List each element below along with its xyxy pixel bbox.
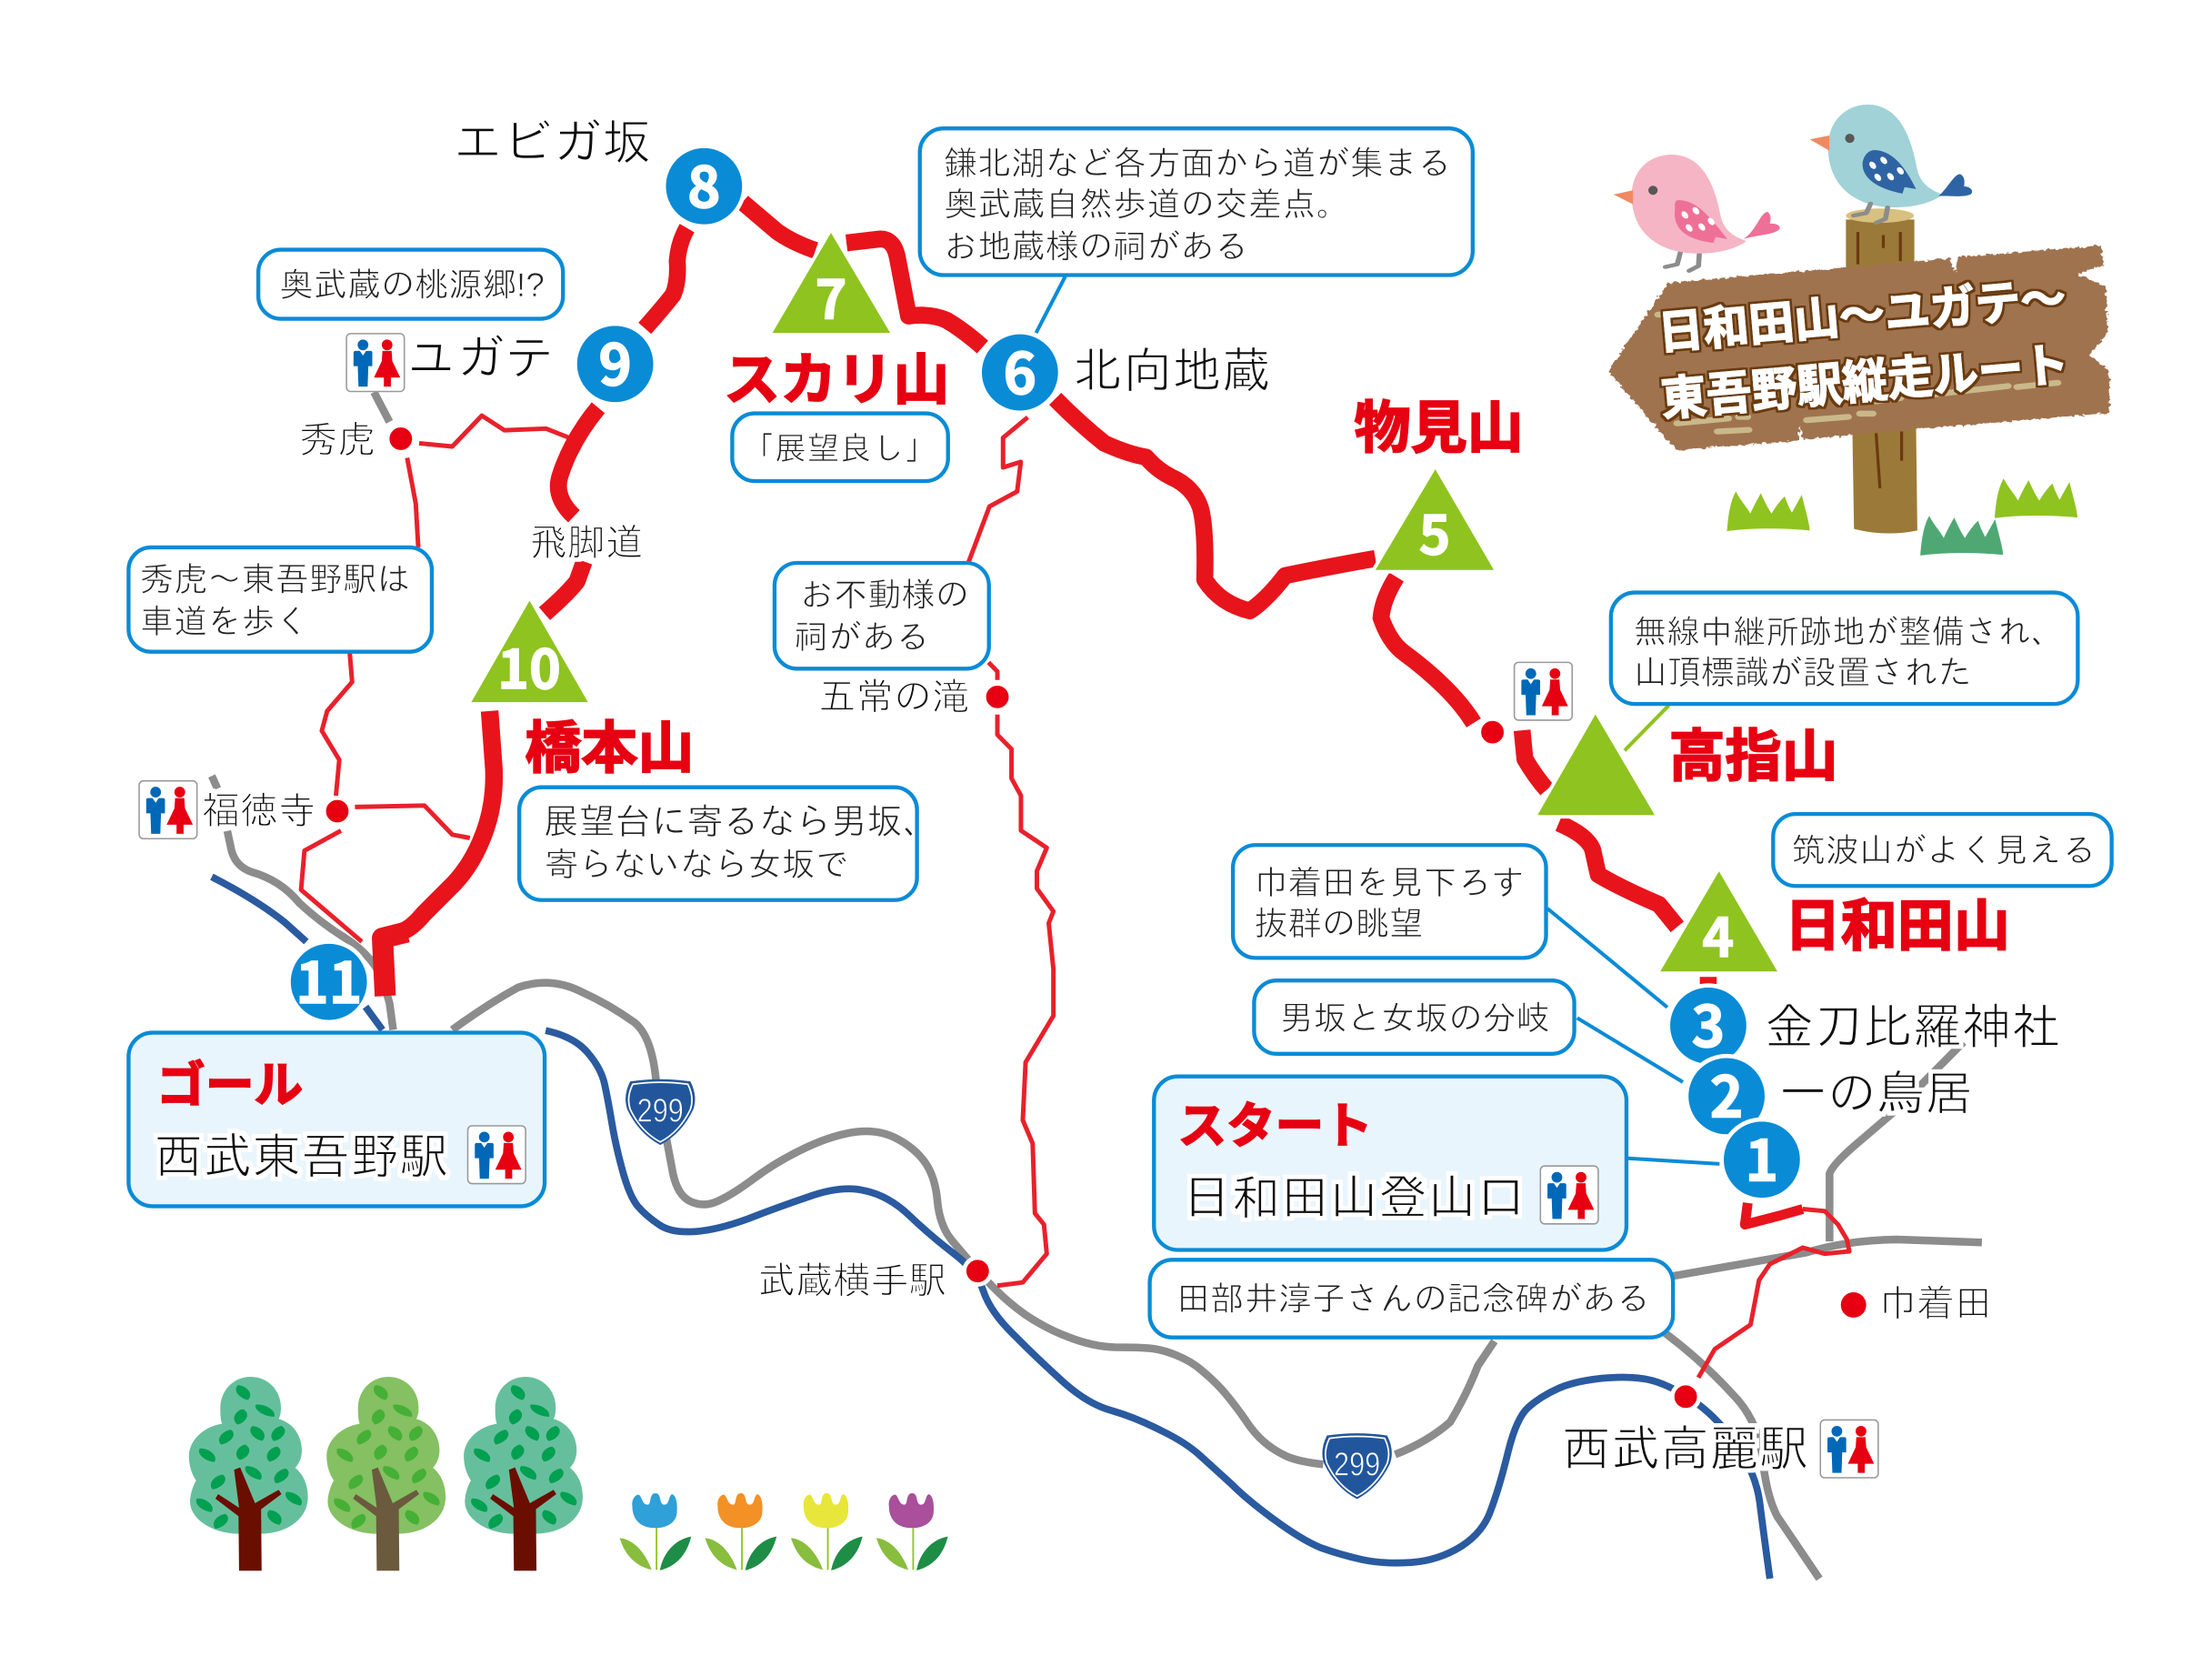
point: 高指山手前: [1479, 718, 1506, 746]
callout: 巾着田: 抜群の眺望: [1254, 905, 1423, 943]
callout: 車道: 秀虎～東吾野駅は: [140, 560, 411, 598]
start panel: [1154, 1077, 1626, 1249]
label: 飛脚道: 飛脚道: [529, 521, 644, 564]
tree 1: [189, 1377, 308, 1571]
road network: grey roads: [212, 392, 1982, 1579]
icon: toilet 福徳寺: [139, 781, 197, 838]
waypoint 3: 金刀比羅神社: 3: [1692, 981, 1725, 1063]
peak 7: スカリ山: 7: [816, 257, 846, 335]
point: 巾着田: 巾着田: [1879, 1281, 1992, 1324]
connector lines: [1036, 276, 1719, 1164]
peak 5: 物見山: 物見山: [1355, 397, 1524, 460]
thin red side trails: [301, 416, 1849, 1378]
callout: お不動様: [775, 563, 989, 668]
tree 2: [326, 1377, 445, 1571]
peak: 高指山: 高指山: [1668, 726, 1838, 788]
icon: toilet: [468, 1126, 525, 1184]
waypoint 8: エビガ坂: 8: [687, 142, 721, 224]
goal panel: [128, 1033, 545, 1206]
callout: 桃源郷: 奥武蔵の桃源郷!?: [279, 266, 545, 304]
callout: 筑波山: 筑波山がよく見える: [1791, 831, 2096, 869]
callout: 展望良し: [732, 414, 948, 481]
goal heading: ゴール: [156, 1059, 303, 1113]
sign title: [1656, 272, 2071, 426]
callout: 田部井淳子: [1150, 1260, 1673, 1338]
illustration: trees: [189, 1377, 948, 1571]
peak 10: 橋本山: [471, 601, 694, 780]
callout: 展望台: 寄らないなら女坂で: [545, 845, 849, 883]
callout: 筑波山: [1773, 814, 2112, 886]
callout: 展望良し: 「展望良し」: [742, 431, 936, 467]
callout: 展望台: 展望台に寄るなら男坂、: [544, 802, 939, 842]
waypoint 9: ユガテ: 9: [598, 320, 632, 402]
goal location: 西武東吾野駅: [154, 1130, 448, 1185]
road network: blue national route 299: [212, 877, 1770, 1579]
start heading: スタート: [1178, 1100, 1373, 1154]
peak 4: 日和田山: 4: [1702, 895, 1734, 972]
callout: 車道: 車道を歩く: [140, 603, 309, 641]
callout: 田部井淳子: 田部井淳子さんの記念碑がある: [1176, 1280, 1650, 1318]
wooden sign board: [1609, 246, 2108, 449]
peak 7: スカリ山: スカリ山: [724, 349, 949, 412]
waypoint 8: エビガ坂: [453, 115, 745, 226]
waypoint 1: 1: [1746, 1115, 1778, 1197]
point: 西武高麗駅: [1562, 1383, 1808, 1477]
tree 3: [464, 1377, 583, 1571]
peak 4: 日和田山: [1660, 871, 2010, 972]
icon: toilet 高指山: [1515, 662, 1572, 720]
waypoint 2: 一の鳥居: 一の鳥居: [1778, 1068, 1974, 1121]
callout: お不動様: 祠がある: [795, 618, 930, 657]
waypoint 6: 北向地蔵: 6: [1004, 328, 1036, 410]
peak 10: 橋本山: 10: [497, 627, 561, 704]
main route: thick red trail: [383, 202, 1803, 1225]
route 299 shield north: [626, 1080, 695, 1144]
waypoint 3: 金刀比羅神社: [1668, 981, 2061, 1066]
callout: 巾着田: 巾着田を見下ろす: [1254, 864, 1525, 902]
waypoint 11: 11: [295, 938, 362, 1019]
waypoint 3: 金刀比羅神社: 金刀比羅神社: [1765, 999, 2061, 1055]
route 299 shield north: 299: [637, 1092, 684, 1129]
point: 秀虎: 秀虎: [299, 418, 375, 461]
peak 7: スカリ山: [724, 233, 949, 412]
icon: toilet ユガテ: [346, 334, 405, 391]
point: 福徳寺: 福徳寺: [202, 789, 316, 832]
icon: toilet 西武高麗駅: [1820, 1420, 1878, 1478]
blue bird: [1810, 105, 1972, 223]
callout: 展望台: [519, 788, 939, 900]
point: 武蔵横手駅: 武蔵横手駅: [757, 1260, 946, 1302]
callout: お不動様: お不動様の: [800, 576, 969, 614]
sign title: 東吾野駅縦走ルート: [1659, 338, 2071, 426]
waypoint 9: ユガテ: [406, 320, 656, 404]
peak 5: 物見山: [1355, 397, 1524, 570]
pink bird: [1614, 155, 1780, 271]
illustration: signpost with birds and grass: [1609, 105, 2108, 556]
tulips: [620, 1493, 948, 1571]
waypoint 2: 一の鳥居: 2: [1710, 1052, 1743, 1134]
callout: 無線中継所: [1611, 593, 2077, 704]
callout: 鎌北湖: 鎌北湖など各方面から道が集まる: [944, 144, 1451, 182]
peak 4: 日和田山: 日和田山: [1785, 895, 2010, 958]
peak 10: 橋本山: 橋本山: [525, 718, 694, 780]
sign title: 日和田山～ユガテ～: [1656, 272, 2068, 359]
waypoint 9: ユガテ: ユガテ: [406, 331, 555, 386]
peak 5: 物見山: 5: [1419, 493, 1450, 570]
waypoint 8: エビガ坂: エビガ坂: [453, 115, 652, 170]
waypoint 2: 一の鳥居: [1687, 1052, 1974, 1137]
point: 五常の滝: 五常の滝: [818, 675, 969, 718]
point: 秀虎: [299, 418, 414, 461]
grass tufts: [1727, 478, 2077, 556]
point: 西武高麗駅: 西武高麗駅: [1562, 1421, 1808, 1477]
callout: 男坂と女坂: [1254, 980, 1575, 1054]
waypoint 6: 北向地蔵: [980, 328, 1271, 413]
callout: 鎌北湖: お地蔵様の祠がある: [944, 227, 1248, 266]
callout: 桃源郷: [258, 250, 563, 319]
callout: 無線中継所: 山頂標識が設置された: [1634, 653, 1972, 691]
start location: 日和田山登山口: [1182, 1171, 1526, 1226]
peak: 高指山: [1537, 715, 1838, 815]
waypoint 1: [1722, 1115, 1802, 1199]
route 299 shield south: 299: [1334, 1447, 1380, 1483]
callout: 車道: [128, 547, 432, 652]
callout: 男坂と女坂: 男坂と女坂の分岐: [1279, 999, 1550, 1037]
waypoint 6: 北向地蔵: 北向地蔵: [1074, 344, 1271, 399]
icon: toilet: [1540, 1166, 1598, 1224]
callout: 鎌北湖: [920, 128, 1473, 276]
post: [1846, 208, 1917, 534]
callout: 鎌北湖: 奥武蔵自然歩道の交差点。: [944, 185, 1350, 223]
callout: 巾着田: [1233, 845, 1546, 958]
route 299 shield south: [1323, 1434, 1391, 1499]
callout: 無線中継所: 無線中継所跡地が整備され、: [1634, 613, 2064, 650]
